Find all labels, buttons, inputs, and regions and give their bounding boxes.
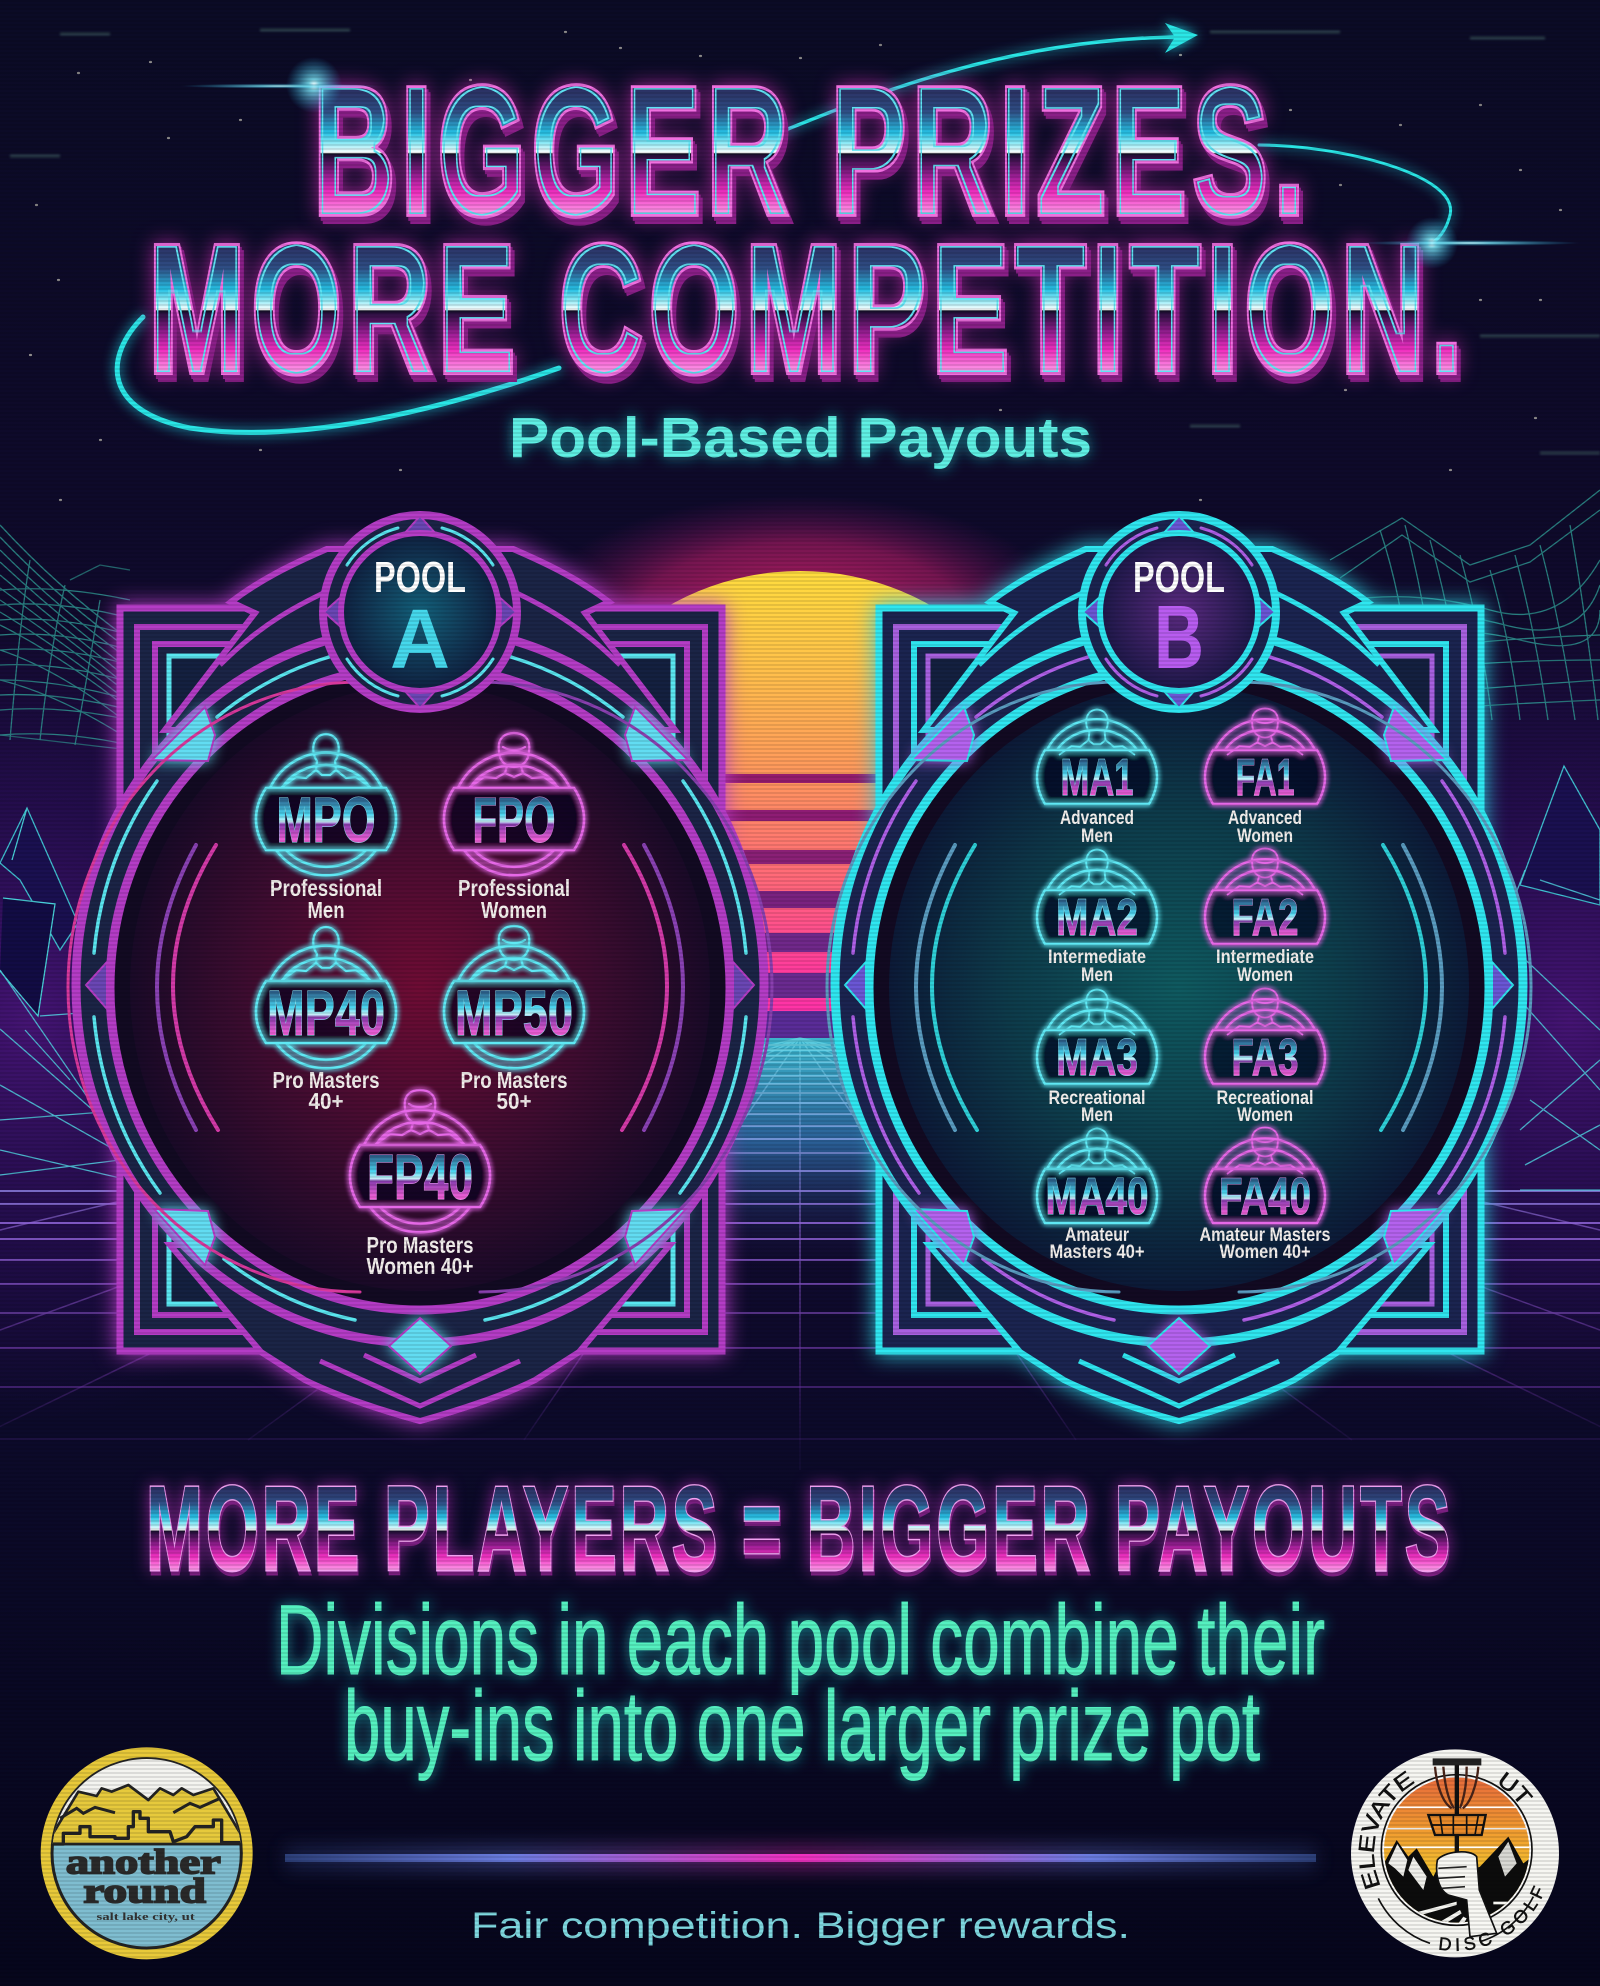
division: MP40: Pro Masters [272,1067,380,1093]
division: FA2: FA2 [1232,889,1298,947]
division: FPO: Women [481,897,547,923]
division: MPO: MPO [276,784,376,856]
division: FPO: Professional [458,875,570,901]
division: MP50: 50+ [496,1088,532,1114]
division: MA1: Men [1081,826,1113,847]
subtitle: Pool-Based Payouts [509,406,1092,470]
logo: another round: salt lake city, ut [96,1912,196,1923]
title [148,48,1468,411]
division: FA1 [1205,709,1325,847]
division: MA3: Recreational [1048,1088,1146,1109]
division: MA2: Men [1081,965,1113,986]
pool B badge: B [1154,588,1204,688]
division: FA1: Women [1237,826,1293,847]
left wireframe mountains [0,525,130,1178]
division: FA40: FA40 [1219,1168,1311,1226]
division: MA3: MA3 [1056,1029,1138,1087]
division: MPO: Professional [270,875,382,901]
division: MPO [256,734,396,923]
pool A badge: A [390,592,450,686]
logo: another round: round [83,1873,206,1911]
tagline: Fair competition. Bigger rewards. [471,1905,1130,1946]
panel: pool A [68,515,772,1421]
division: FP40: Women 40+ [366,1253,474,1279]
division: MA1 [1037,709,1157,847]
division: MP50: Pro Masters [460,1067,568,1093]
panel: pool B [827,515,1531,1421]
logo: another round [41,1747,253,1959]
division: FPO [444,733,584,923]
division: FA3: FA3 [1232,1029,1298,1087]
lens flares [180,57,1580,269]
division: FPO: FPO [472,784,556,856]
division: FA3 [1205,989,1325,1126]
division: FP40 [350,1090,490,1279]
division: MA2 [1037,849,1157,986]
division: FA40: Amateur Masters [1200,1225,1330,1246]
logo: elevate ut disc golf: DISC GOLF [1439,1885,1542,1952]
division: MA1: MA1 [1060,749,1134,807]
explanation text [276,1584,1325,1781]
division: FA2 [1205,849,1325,986]
division: FA2: Intermediate [1216,947,1314,968]
right wireframe mountains [1330,490,1600,1190]
division: MP50 [444,926,584,1114]
division: MA40 [1037,1128,1157,1263]
title swoosh [117,23,1451,432]
division: MP40: 40+ [308,1088,344,1114]
logo: elevate ut disc golf: ELEVATE [1358,1770,1415,1890]
division: FP40: Pro Masters [366,1232,474,1258]
logo: elevate ut disc golf: UT [1500,1772,1534,1802]
division: MA2: MA2 [1056,889,1138,947]
division: FA40: Women 40+ [1220,1242,1310,1263]
division: FA2: Women [1237,965,1293,986]
sun [671,571,929,1038]
division: FA3: Women [1237,1105,1293,1126]
division: MA3: Men [1081,1105,1113,1126]
logo: elevate ut disc golf [1351,1749,1559,1958]
division: MA40: Masters 40+ [1050,1242,1144,1263]
floor grid [0,1038,1600,1470]
division: MP40 [256,927,396,1114]
stars and glitch streaks [10,30,1600,500]
division: MPO: Men [308,897,344,923]
pool B badge: POOL [1133,553,1225,602]
background haze [0,495,1600,1420]
pool B badge [1082,515,1276,709]
divider [285,1846,1316,1870]
division: MA40: MA40 [1045,1168,1149,1226]
pool A badge: POOL [374,553,466,602]
logo: another round: another [66,1843,221,1881]
division: MA40: Amateur [1065,1225,1130,1246]
division: FA1: Advanced [1228,808,1302,829]
division: FA3: Recreational [1216,1088,1314,1109]
division: MA1: Advanced [1060,808,1134,829]
division: MP50: MP50 [455,977,573,1049]
division: MA2: Intermediate [1048,947,1146,968]
division: FA1: FA1 [1236,749,1294,807]
division: MA3 [1037,989,1157,1126]
pool A badge [323,515,517,709]
division: MP40: MP40 [267,977,385,1049]
division: FA40 [1200,1128,1330,1263]
division: FP40: FP40 [367,1141,473,1213]
